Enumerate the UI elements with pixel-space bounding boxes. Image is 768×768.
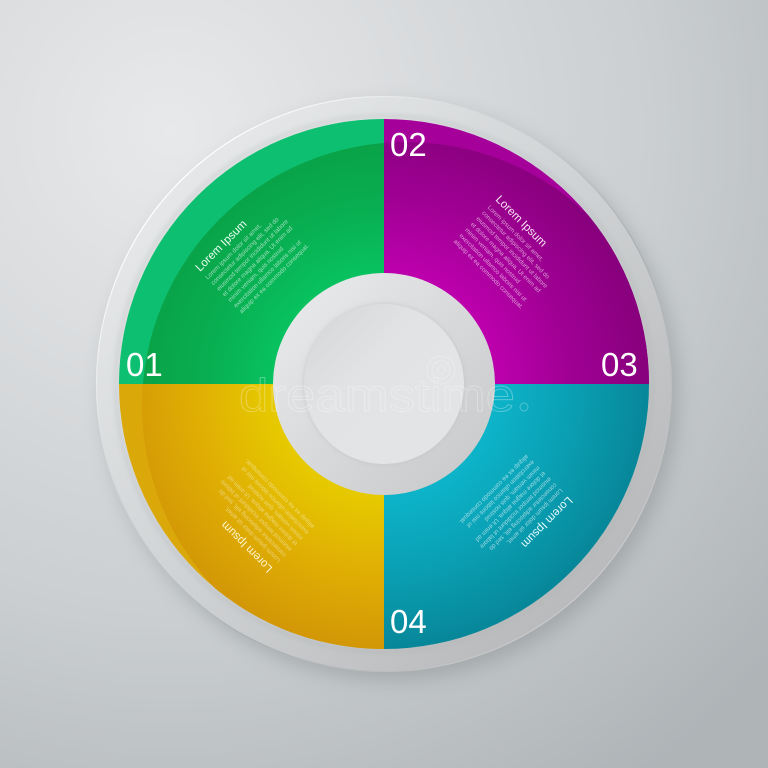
number 01: 01 (126, 346, 163, 383)
quadrant: green (119, 119, 384, 384)
text block: purple: et dolore magna aliqua. Ut enim ad (469, 221, 542, 295)
text block: yellow: minim veniam, quis nostrud (246, 483, 305, 541)
text block: blue: aliquip ex ea commodo consequat. (457, 453, 530, 526)
quadrant: blue (384, 384, 649, 649)
text block: green: eiusmod tempor incididunt ut labore (216, 218, 290, 293)
text block: purple: eiusmod tempor incididunt ut labore (474, 216, 549, 290)
number 02: 02 (390, 126, 427, 163)
text block: yellow (197, 455, 316, 574)
text block: yellow: Lorem Ipsum (219, 518, 275, 574)
text block: blue: minim veniam, quis nostrud (483, 464, 541, 523)
text block: blue: Lorem Ipsum (518, 494, 574, 550)
centre hub (273, 273, 495, 495)
quadrant: purple (384, 119, 649, 384)
text block: purple: aliquip ex ea commodo consequat. (452, 238, 525, 311)
outer glass ring (96, 96, 672, 672)
text block: blue: eiusmod tempor incididunt ut labore (478, 475, 552, 550)
text block: yellow: eiusmod tempor incididunt ut labore (219, 478, 294, 552)
quadrant: yellow (119, 384, 384, 649)
text block: purple: minim veniam, quis nostrud (463, 227, 522, 285)
text block: purple: Lorem ipsum dolor sit amet, (486, 204, 545, 263)
text block: yellow: exercitation ullamco laboris nisi ut (240, 465, 310, 535)
text block: purple: Lorem Ipsum (493, 194, 549, 250)
text block: green: et dolore magna aliqua. Ut enim ad (221, 225, 295, 298)
number 03: 03 (601, 346, 638, 383)
text block: green (194, 196, 313, 315)
text block: blue (455, 453, 574, 572)
text block: green: minim veniam, quis nostrud (227, 245, 285, 304)
watermark: dreamstime (239, 369, 515, 421)
text block: blue: et dolore magna aliqua. Ut enim ad (473, 470, 547, 543)
text block: blue: exercitation ullamco laboris nisi ut (465, 459, 535, 529)
text block: yellow: et dolore magna aliqua. Ut enim ad (226, 473, 299, 547)
text block: purple: consectetur adipiscing elit, sed do (480, 210, 551, 281)
text block: yellow: Lorem ipsum dolor sit amet, (223, 505, 282, 564)
text block: green: Lorem ipsum dolor sit amet, (204, 222, 263, 281)
text block: purple (452, 194, 571, 313)
text block: green: exercitation ullamco laboris nisi ut (233, 239, 303, 309)
text block: green: aliquip ex ea commodo consequat. (238, 242, 311, 315)
text block: green: consectetur adipiscing elit, sed do (210, 216, 281, 287)
text block: green: Lorem Ipsum (194, 218, 250, 274)
number 04: 04 (390, 603, 427, 640)
text block: yellow: aliquip ex ea commodo consequat. (243, 457, 316, 530)
text block: blue: consectetur adipiscing elit, sed do (487, 481, 558, 552)
text block: blue: Lorem ipsum dolor sit amet, (505, 487, 564, 546)
text block: purple: exercitation ullamco laboris nisi ut (458, 233, 528, 303)
text block: yellow: consectetur adipiscing elit, sed do (217, 487, 288, 558)
watermark (239, 356, 528, 421)
disc shadow (104, 106, 678, 680)
